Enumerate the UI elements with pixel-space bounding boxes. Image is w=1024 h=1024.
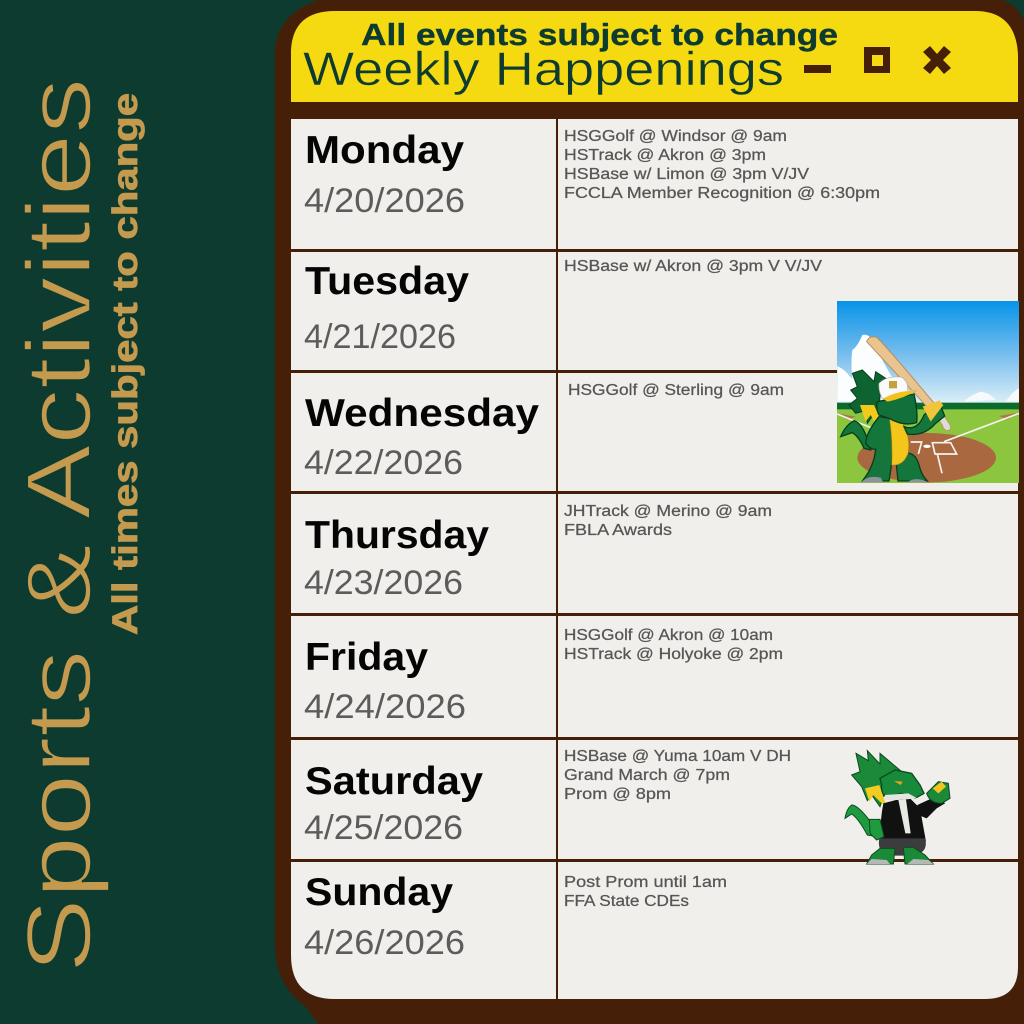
notice text: All events subject to change: [361, 17, 838, 52]
icon: baseball dragon picture: [837, 301, 1019, 483]
near leg and left arm: [862, 417, 892, 481]
row: Monday: HSTrack @ Akron @ 3pm: [564, 147, 766, 164]
row: Friday: HSTrack @ Holyoke @ 2pm: [564, 646, 783, 663]
panel: yellow title bar: [291, 11, 1018, 102]
icon: minimize: [804, 65, 831, 73]
panel: brown window frame: [275, 0, 1024, 1024]
row: Wednesday: HSGGolf @ Sterling @ 9am: [568, 382, 784, 399]
wing: [852, 751, 902, 807]
row: Monday: [304, 128, 880, 220]
row: Thursday: [304, 503, 772, 602]
row: Wednesday: [304, 382, 784, 482]
row: Tuesday: HSBase w/ Akron @ 3pm V V/JV: [564, 258, 823, 275]
row: Wednesday: Wednesday: [305, 392, 539, 435]
sidebar subtitle: All times subject to change: [106, 93, 145, 635]
row: Friday: HSGGolf @ Akron @ 10am: [564, 627, 773, 644]
row: Monday: Monday: [305, 129, 464, 172]
head: [880, 770, 924, 798]
row: Thursday: JHTrack @ Merino @ 9am: [564, 503, 772, 520]
icon: close: [923, 46, 951, 74]
row: Sunday: [304, 871, 727, 962]
row: Thursday: 4/23/2026: [304, 564, 463, 602]
row: Sunday: Post Prom until 1am: [564, 874, 727, 891]
suit: [880, 797, 926, 842]
row: Friday: [304, 627, 783, 726]
row: Thursday: FBLA Awards: [564, 522, 672, 539]
head: [877, 394, 917, 424]
row: Sunday: FFA State CDEs: [564, 893, 689, 910]
sidebar title: Sports & Activities: [9, 78, 110, 973]
row: Monday: HSGGolf @ Windsor @ 9am: [564, 128, 787, 145]
row: Monday: FCCLA Member Recognition @ 6:30pm: [564, 185, 880, 202]
row: Monday: HSBase w/ Limon @ 3pm V/JV: [564, 166, 810, 183]
row: Tuesday: [304, 258, 823, 356]
panel: schedule table: [291, 119, 1018, 999]
far leg: [896, 453, 927, 481]
row: Tuesday: 4/21/2026: [304, 318, 456, 356]
row: Friday: Friday: [305, 636, 428, 679]
row: Sunday: 4/26/2026: [304, 924, 465, 962]
icon: suited dragon mascot: [845, 751, 950, 864]
fist: [927, 782, 950, 803]
row: Tuesday: Tuesday: [305, 260, 469, 303]
right arm: [904, 402, 945, 434]
row: Saturday: [304, 748, 791, 847]
clouds are drawn in zoomed coordinates: [837, 335, 904, 402]
icon: maximize: [864, 47, 890, 73]
row: Saturday: HSBase @ Yuma 10am V DH: [564, 748, 791, 765]
feet: [867, 848, 895, 864]
row: Thursday: Thursday: [305, 514, 489, 557]
row: Saturday: Saturday: [305, 760, 483, 803]
heading: Weekly Happenings: [303, 42, 784, 95]
row: Friday: 4/24/2026: [304, 688, 466, 726]
row: Wednesday: 4/22/2026: [304, 444, 463, 482]
row: Sunday: Sunday: [305, 871, 453, 914]
row: Saturday: Grand March @ 7pm: [564, 767, 730, 784]
row: Saturday: 4/25/2026: [304, 809, 463, 847]
row: Saturday: Prom @ 8pm: [564, 786, 671, 803]
row: Monday: 4/20/2026: [304, 182, 465, 220]
